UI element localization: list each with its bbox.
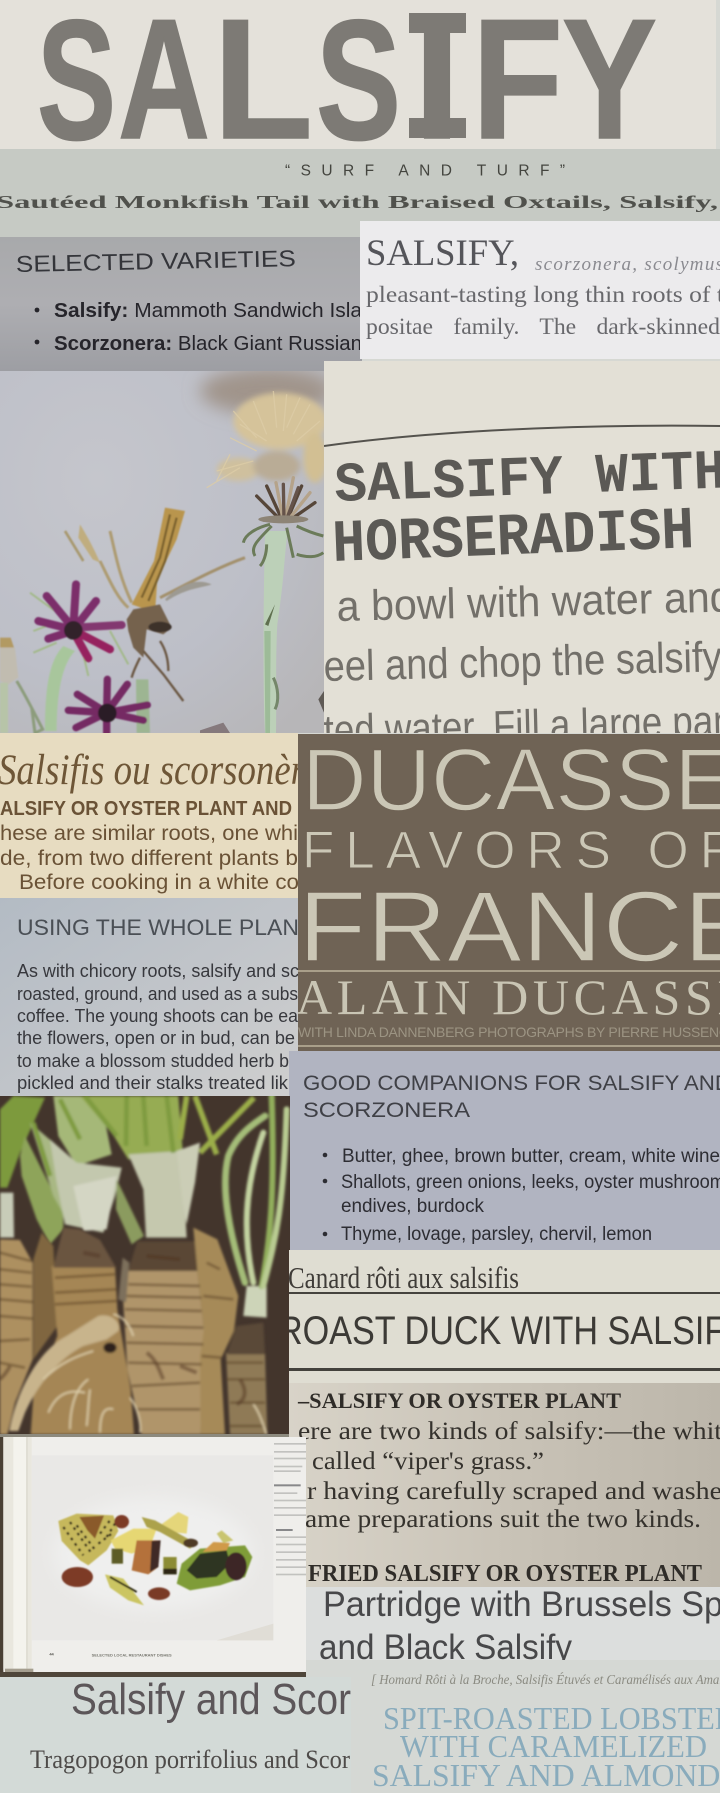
- title: France: FRANCE: [298, 871, 720, 983]
- list: companions: Butter, ghee, brown butter, cream, white wine: [342, 1146, 720, 1167]
- text: body: de, from two different plants b: [0, 847, 298, 870]
- food: [58, 1512, 252, 1605]
- text: French title: Canard rôti aux salsifis: [288, 1260, 519, 1295]
- text: body: Before cooking in a white co: [19, 871, 299, 894]
- panel: SALSIFY title banner: [0, 0, 716, 176]
- text: body: pickled and their stalks treated lik: [17, 1072, 289, 1093]
- heading: salsify with horseradish: HORSERADISH: [331, 498, 695, 580]
- text: body: the flowers, open or in bud, can be: [17, 1027, 295, 1048]
- panel: good companions: [289, 1051, 720, 1250]
- panel: salsify and scorzonera heading: [30, 1675, 351, 1774]
- panel: using the whole plant: [0, 898, 299, 1096]
- text: body: called “viper's grass.”: [312, 1448, 544, 1475]
- panel: spit-roasted lobster recipe title: [371, 1672, 720, 1793]
- text: body: hese are similar roots, one whi: [0, 822, 298, 845]
- title: Flavors of: FLAVORS OF: [302, 821, 720, 880]
- leaves: [0, 1096, 287, 1318]
- panel: salsify dictionary entry: [360, 221, 720, 359]
- panel: partridge recipe title: and Black Salsify: [319, 1628, 572, 1667]
- list: varieties: Scorzonera: Black Giant Russian: [54, 333, 362, 355]
- heading: surf and turf: “SURF AND TURF”: [285, 162, 565, 180]
- panel: salsify dictionary entry: positae family. The dark-skinned: [366, 314, 720, 339]
- list: companions: Thyme, lovage, parsley, chervil, lemon: [341, 1224, 652, 1245]
- text: monkfish dish: Sautéed Monkfish Tail with Braised Oxtails, Salsify,: [0, 192, 718, 212]
- heading: fried salsify: FRIED SALSIFY OR OYSTER PLANT: [308, 1561, 702, 1587]
- text: entry body: pleasant-tasting long thin roots of t: [366, 282, 720, 307]
- subheading: salsify or oyster plant: ALSIFY OR OYSTER PLANT AND: [0, 798, 292, 820]
- text: body: ere are two kinds of salsify:—the whit: [298, 1418, 720, 1445]
- photo: plated dish in open book: [0, 1437, 306, 1677]
- panel: salsify or oyster plant text: [289, 1383, 720, 1587]
- panel: surf and turf menu strip: [0, 149, 720, 237]
- page footer: 44: [49, 1652, 55, 1657]
- small seed head at left edge: [0, 638, 43, 733]
- panel: salsify with horseradish recipe: [323, 361, 720, 755]
- heading: salsify or oyster plant: –SALSIFY OR OYSTER PLANT: [297, 1388, 621, 1413]
- panel: canard rôti recipe title: [278, 1250, 720, 1383]
- panel: salsifis ou scorsonère: [0, 733, 320, 898]
- heading: good companions: GOOD COMPANIONS FOR SALSIFY AND: [303, 1071, 720, 1095]
- text: body: to make a blossom studded herb b: [17, 1050, 289, 1071]
- text: recipe steps: [323, 573, 720, 755]
- text: body: [298, 1418, 720, 1533]
- seed head: tall dandelion: [207, 391, 327, 733]
- heading: salsify with horseradish: [331, 440, 720, 580]
- list: varieties: Salsify: Mammoth Sandwich Isla: [54, 300, 363, 322]
- heading: good companions: [303, 1071, 720, 1122]
- text: body: r having carefully scraped and washe: [307, 1478, 720, 1505]
- text: body: ame preparations suit the two kinds.: [305, 1506, 701, 1533]
- list: companions: endives, burdock: [341, 1196, 484, 1217]
- heading: good companions: SCORZONERA: [303, 1098, 471, 1122]
- title: SALSIFY: [37, 0, 657, 176]
- purple flower two: [68, 679, 150, 733]
- side column text lines: [274, 1443, 306, 1575]
- purple flower one: [30, 584, 128, 731]
- list: varieties: [35, 300, 363, 355]
- text: body: [17, 960, 299, 1093]
- title: Ducasse: DUCASSE: [302, 730, 720, 829]
- title: spit-roasted lobster: WITH CARAMELIZED: [400, 1728, 707, 1764]
- roots: [0, 1228, 267, 1434]
- text: latin names: scorzonera, scolymus: [535, 254, 720, 275]
- heading: selected varieties: SELECTED VARIETIES: [16, 245, 296, 277]
- heading: salsify entry: SALSIFY,: [366, 233, 519, 274]
- panel: partridge recipe title: [306, 1585, 720, 1667]
- panel: selected varieties: [0, 237, 363, 371]
- photo: salsify flowers: [0, 371, 324, 733]
- text: body: [0, 822, 299, 894]
- heading: using the whole plant: USING THE WHOLE PLAN: [17, 915, 299, 940]
- dried flower: [65, 508, 245, 701]
- photo: salsify roots: [0, 1096, 290, 1437]
- panel: Ducasse Flavors of France book cover: [296, 730, 720, 1051]
- title: spit-roasted lobster: [372, 1700, 720, 1793]
- list: companions: [323, 1146, 720, 1245]
- photo: plated dish in open book: SELECTED LOCAL RESTAURANT DISHES: [92, 1653, 172, 1658]
